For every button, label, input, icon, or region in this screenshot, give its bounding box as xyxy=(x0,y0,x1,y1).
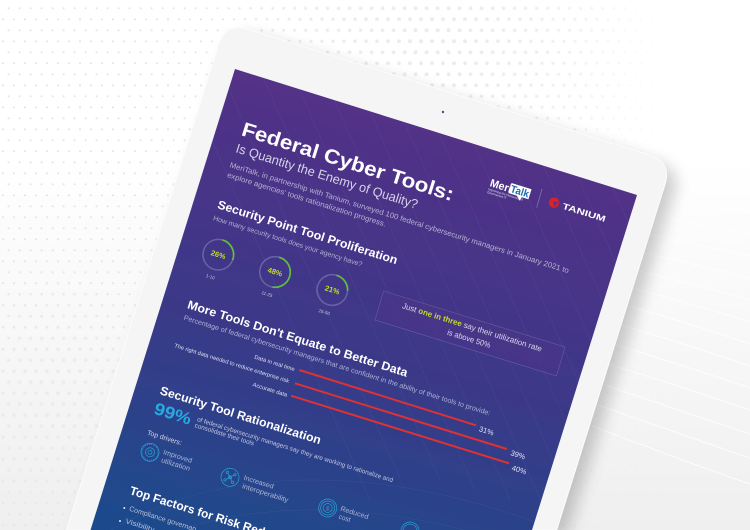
donut: 48%: 48% xyxy=(266,265,284,279)
logo: MeriTalk xyxy=(487,177,532,203)
bar: data in real time xyxy=(253,355,495,437)
bar: data in real time: 31% xyxy=(478,424,495,437)
driver: improved utilization xyxy=(139,441,193,473)
logo: MeriTalk: Improving the Outcomes of xyxy=(488,187,523,202)
background white lines xyxy=(540,172,750,484)
label: top drivers: Top drivers: xyxy=(146,430,183,447)
donut: 26%: 26% xyxy=(210,248,227,261)
heading: more tools: More Tools Don't Equate to Better Data xyxy=(186,298,410,380)
bar: the right data xyxy=(173,343,527,461)
donut: 26%: 1-10 xyxy=(205,273,216,281)
callout: one in three: is above 50% xyxy=(446,328,492,350)
driver: reduced cost xyxy=(316,497,369,524)
donut: 21% xyxy=(310,271,351,319)
driver: increased interoperability xyxy=(219,466,289,504)
background large dots top xyxy=(310,6,550,109)
bar: accurate data: 40% xyxy=(511,463,528,476)
callout: one in three xyxy=(375,291,565,376)
background dot pattern xyxy=(2,7,609,526)
driver: reduced cost: Reduced xyxy=(339,506,369,521)
driver: reduced cost: cost xyxy=(338,514,351,524)
intro text: MeriTalk, in partnership with Tanium, surveyed 100 federal cybersecurity managers in January 2021 to xyxy=(229,160,570,275)
heading: security tool rationalization: Security Tool Rationalization xyxy=(158,384,323,447)
intro text: explore agencies' tools rationalization progress. xyxy=(226,170,387,229)
tablet shadow xyxy=(76,36,676,530)
donut: 21%: 26-50 xyxy=(318,308,331,316)
driver: increased interoperability: interoperability xyxy=(241,483,289,504)
driver: reduced cost: $ xyxy=(325,506,330,513)
logo: MeriTalk: Meri xyxy=(488,177,513,195)
callout: one in three: Just one in three say their utilization rate xyxy=(401,301,544,354)
icon: tablet camera xyxy=(442,111,444,113)
heading: security point tool proliferation: Security Point Tool Proliferation xyxy=(216,198,399,267)
logo: Tanium xyxy=(549,198,607,224)
bar chart: confidence in tools xyxy=(173,343,528,476)
driver: increased interoperability: Increased xyxy=(243,475,274,491)
subtitle: Is Quantity the Enemy of Quality? xyxy=(234,141,420,212)
subheading: percentage: Percentage of federal cybersecurity managers that are confident in the ability of their tools to provide: xyxy=(183,315,491,417)
driver: partial icon xyxy=(399,520,421,530)
donut: 21%: 21% xyxy=(324,283,341,297)
logo: MeriTalk: Government IT xyxy=(487,190,507,200)
background large dots left xyxy=(40,370,76,406)
title: Federal Cyber Tools: xyxy=(239,119,456,206)
tablet body xyxy=(66,28,667,530)
donut: 48%: 11-25 xyxy=(261,290,274,298)
donut: 48% xyxy=(253,253,294,301)
logo divider xyxy=(537,189,542,208)
bar: data in real time: Data in real time xyxy=(253,355,295,373)
bar: accurate data: Accurate data xyxy=(252,382,289,399)
bar: the right data: The right data needed to reduce enterprise risk xyxy=(173,343,290,385)
bar: the right data: 39% xyxy=(509,448,527,461)
donut: 26% xyxy=(196,236,237,284)
subheading: how many tools: How many security tools does your agency have? xyxy=(212,215,363,269)
logo: MeriTalk: Talk xyxy=(509,183,531,200)
driver: improved utilization: utilization xyxy=(160,457,191,473)
infographic screen xyxy=(90,69,637,530)
driver: improved utilization: Improved xyxy=(162,449,193,465)
screen background xyxy=(90,69,637,530)
stat description: of federal cybersecurity managers say they are working to rationalize and xyxy=(196,416,394,484)
bar: accurate data xyxy=(252,382,528,476)
stat description: consolidate their tools xyxy=(194,422,256,448)
stat: 99%: 99% xyxy=(152,399,194,429)
logo: Tanium: TANIUM xyxy=(561,201,607,224)
